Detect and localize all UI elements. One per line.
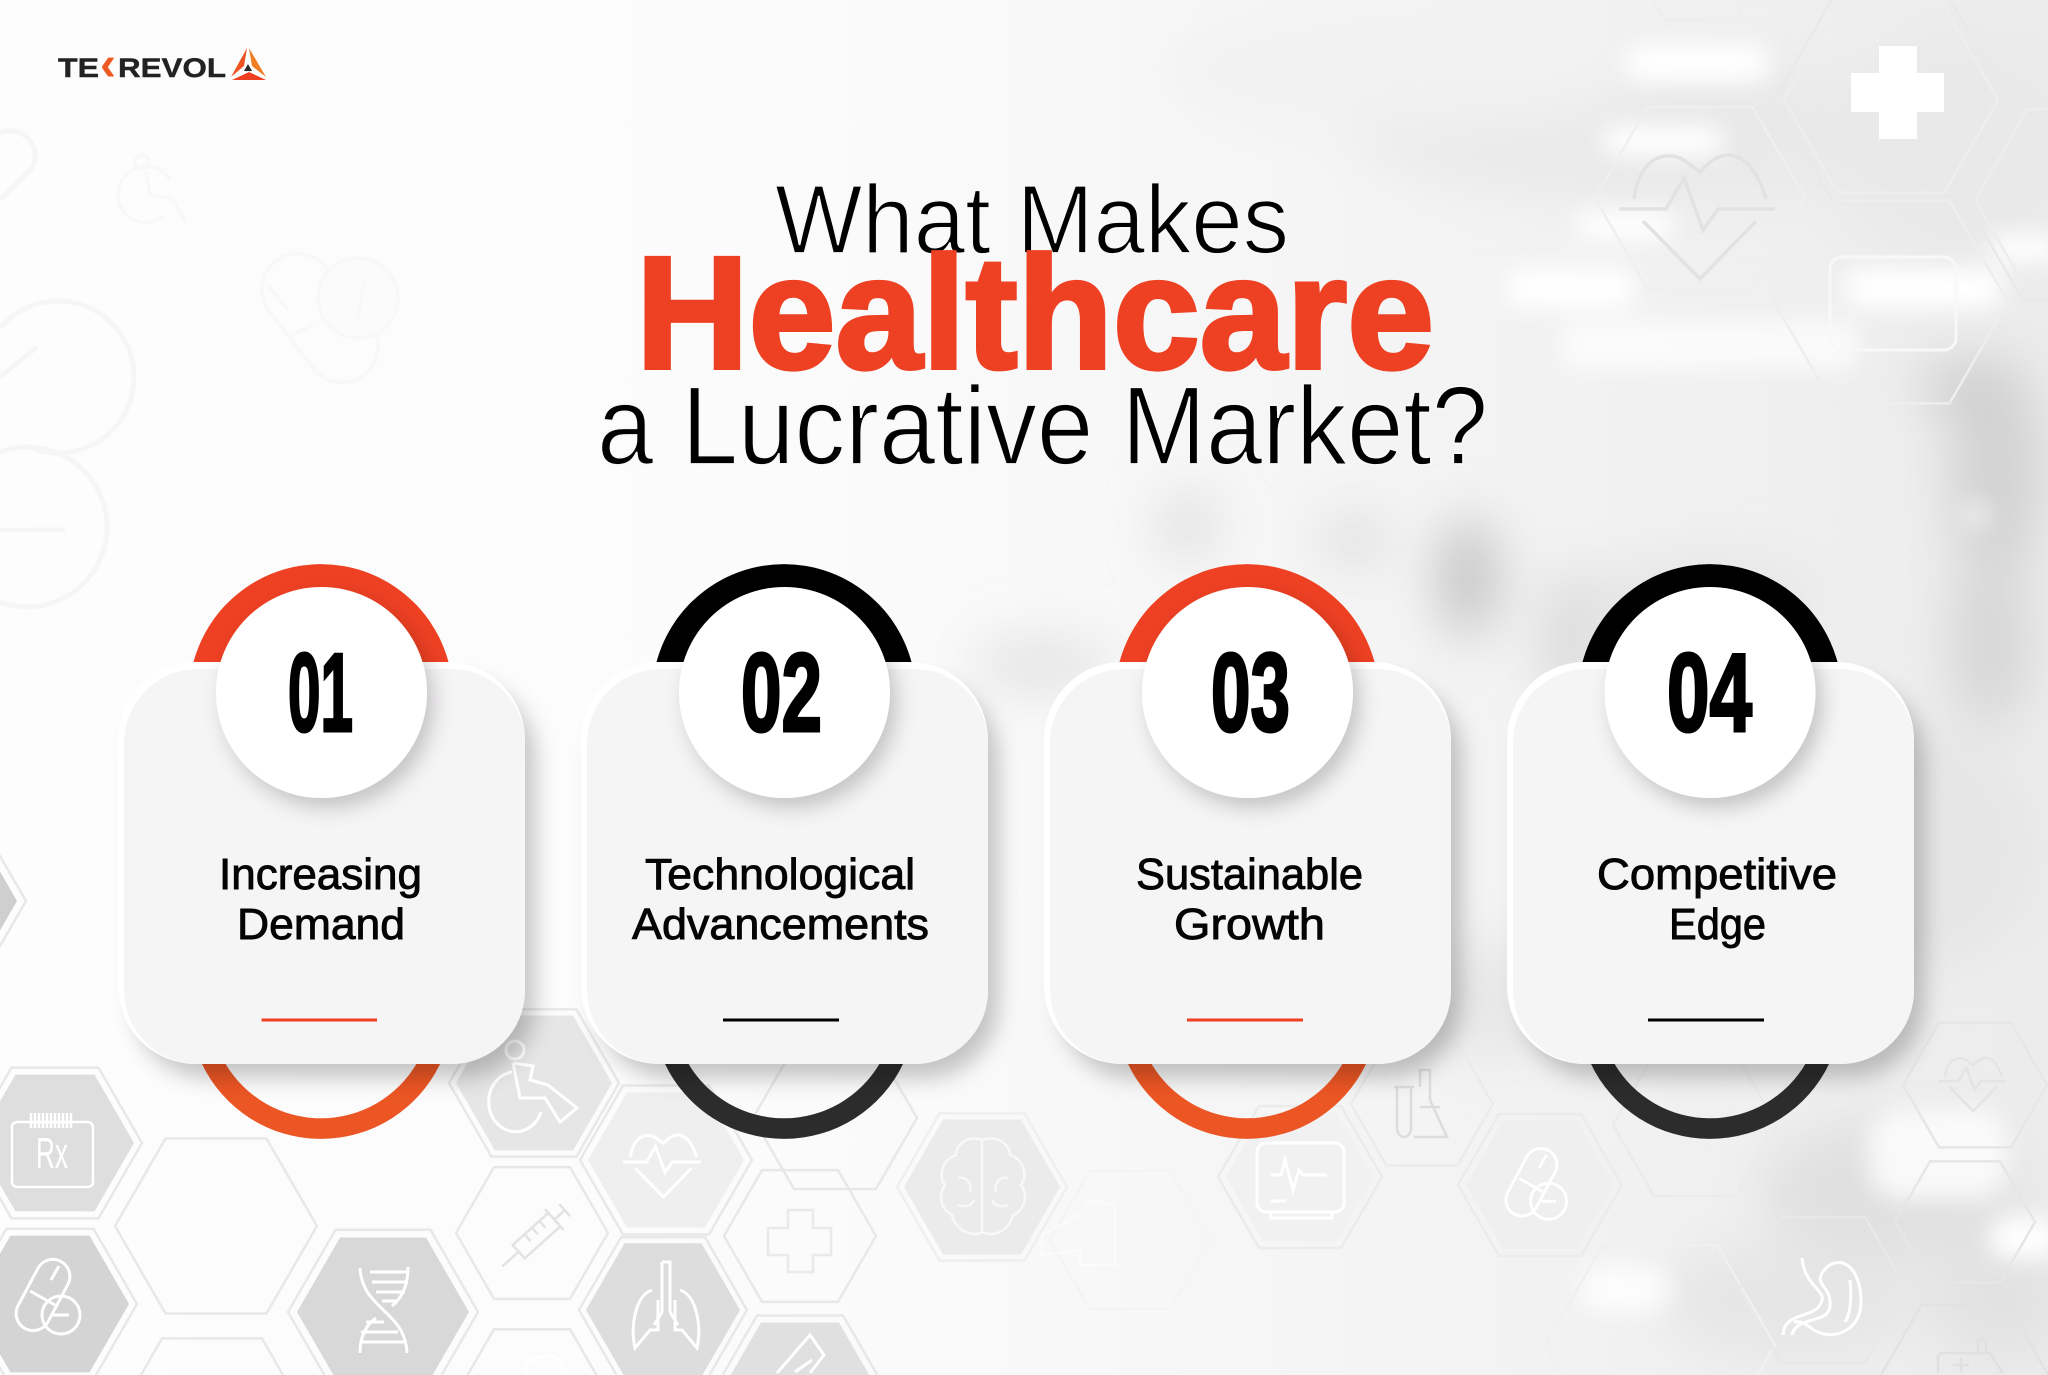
card 01: Increasing Demand — [118, 564, 525, 1139]
top arc — [194, 564, 448, 662]
background: hexagon tiles lower right — [1050, 1023, 2048, 1375]
bottom arc — [1128, 1063, 1366, 1139]
card panel — [1507, 662, 1914, 1064]
card panel — [118, 662, 525, 1064]
icon: monitor outline top right — [1830, 257, 1956, 350]
icon: DNA — [360, 1267, 408, 1353]
icon: brain — [941, 1139, 1025, 1234]
icon: lungs — [633, 1262, 699, 1348]
card label: Sustainable — [1136, 850, 1363, 899]
underline — [1187, 1018, 1303, 1022]
icon: lower tile shapes — [525, 1335, 824, 1373]
top arc — [1582, 564, 1838, 662]
icon: prescription: Rx — [36, 1129, 68, 1178]
underline — [1648, 1018, 1764, 1022]
bottom arc — [1590, 1063, 1830, 1139]
card label: Technological — [645, 850, 915, 899]
number badge: 01 — [288, 631, 353, 755]
card label — [1597, 850, 1837, 949]
icon: monitor — [1257, 1143, 1344, 1218]
background: hexagon tiles lower left — [0, 826, 1067, 1375]
number badge: 03 — [1211, 631, 1290, 755]
icon: syringe — [493, 1200, 574, 1277]
card label: Demand — [237, 900, 405, 949]
icon: stomach — [1783, 1258, 1861, 1335]
number badge — [216, 587, 427, 798]
card label — [1136, 850, 1363, 949]
icon: white cross — [1851, 46, 1944, 139]
number badge: 04 — [1667, 631, 1752, 755]
logo wordmark: ‹ — [100, 38, 116, 91]
icon: prescription — [12, 1113, 93, 1187]
icon: medical cross outline — [768, 1210, 831, 1272]
icon: wheelchair — [489, 1041, 577, 1132]
icon: pill faint — [1500, 1143, 1567, 1222]
number badge — [1142, 587, 1353, 798]
card label: Growth — [1174, 900, 1325, 949]
top arc — [656, 564, 912, 662]
icon: heartbeat top right — [1619, 155, 1775, 279]
logo wordmark: TE — [58, 53, 99, 83]
bottom arc — [202, 1063, 440, 1139]
icon: hand faint — [1042, 1200, 1115, 1265]
card panel — [581, 662, 988, 1064]
logo triangle mark — [231, 48, 266, 80]
icon: pill — [10, 1253, 80, 1337]
card 03: Sustainable Growth — [1044, 564, 1451, 1139]
card 02: Technological Advancements — [581, 564, 988, 1139]
icon: ambulance — [1938, 1336, 2003, 1373]
title line 3: a Lucrative Market? — [597, 364, 1488, 488]
icon: heart rate — [623, 1135, 701, 1197]
underline — [262, 1018, 377, 1022]
card label: Competitive — [1597, 850, 1837, 899]
logo wordmark — [58, 38, 226, 91]
card label: Edge — [1669, 900, 1766, 949]
title line 1: What Makes — [775, 165, 1289, 274]
card label: Increasing — [219, 850, 422, 899]
logo wordmark: REVOL — [118, 53, 226, 83]
background: faint medical icons upper left — [0, 131, 398, 607]
number badge — [679, 587, 890, 798]
card panel — [1044, 662, 1451, 1064]
top arc — [1120, 564, 1374, 662]
icon: heart rate right — [1938, 1058, 2006, 1111]
title — [597, 165, 1488, 488]
bottom arc — [664, 1063, 904, 1139]
number badge: 02 — [741, 631, 822, 755]
card label — [219, 850, 422, 949]
card 04: Competitive Edge — [1507, 564, 1914, 1139]
title line 2: Healthcare: Healthcare — [636, 223, 1434, 402]
background: hexagon grid top right — [1595, 0, 2048, 403]
card label: Advancements — [632, 900, 929, 949]
card label — [632, 850, 929, 949]
logo — [58, 38, 266, 91]
number badge — [1604, 587, 1816, 798]
icon: clipboard — [925, 1274, 988, 1367]
icon: lab flask — [1394, 1070, 1447, 1137]
underline — [723, 1018, 839, 1022]
